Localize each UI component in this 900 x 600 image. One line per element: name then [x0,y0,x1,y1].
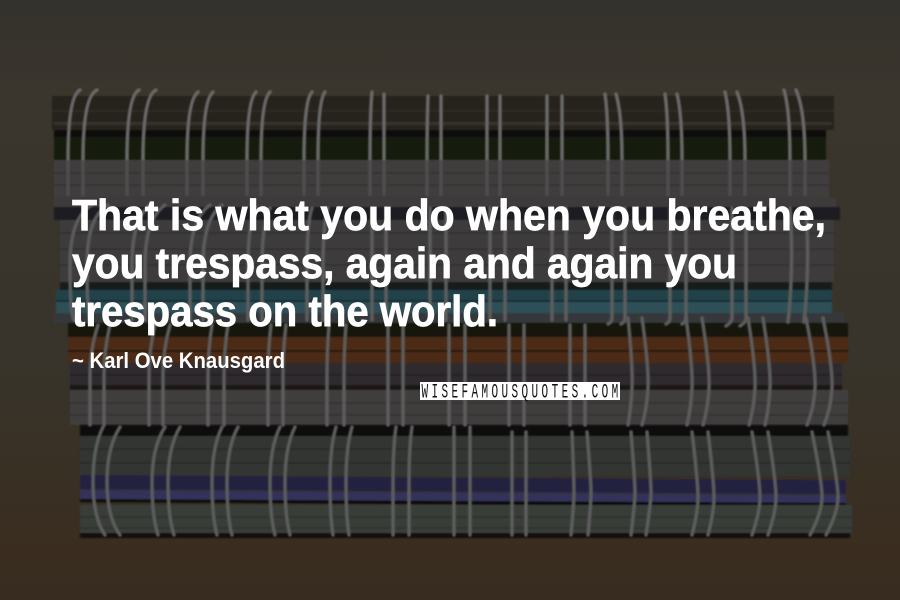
spiral binding tier 2 [70,205,808,326]
watermark badge: WISEFAMOUSQUOTES.COM [422,381,622,404]
notebook tier 3 pages [68,323,848,425]
quote text: That is what you do when you breathe, [72,191,826,240]
notebook tier 1 pages [52,96,834,198]
quote text: you trespass, again and again you [72,239,737,288]
attribution: ~ Karl Ove Knausgard [72,348,285,373]
notebook tier 2 pages [54,198,844,323]
quote text [72,191,826,336]
spiral binding tier 1 [68,90,805,196]
quote text: trespass on the world. [72,287,498,336]
spiral binding tier 3 [90,318,832,425]
notebook tier 4 pages [80,425,852,538]
spiral binding tier 4 [93,427,838,535]
